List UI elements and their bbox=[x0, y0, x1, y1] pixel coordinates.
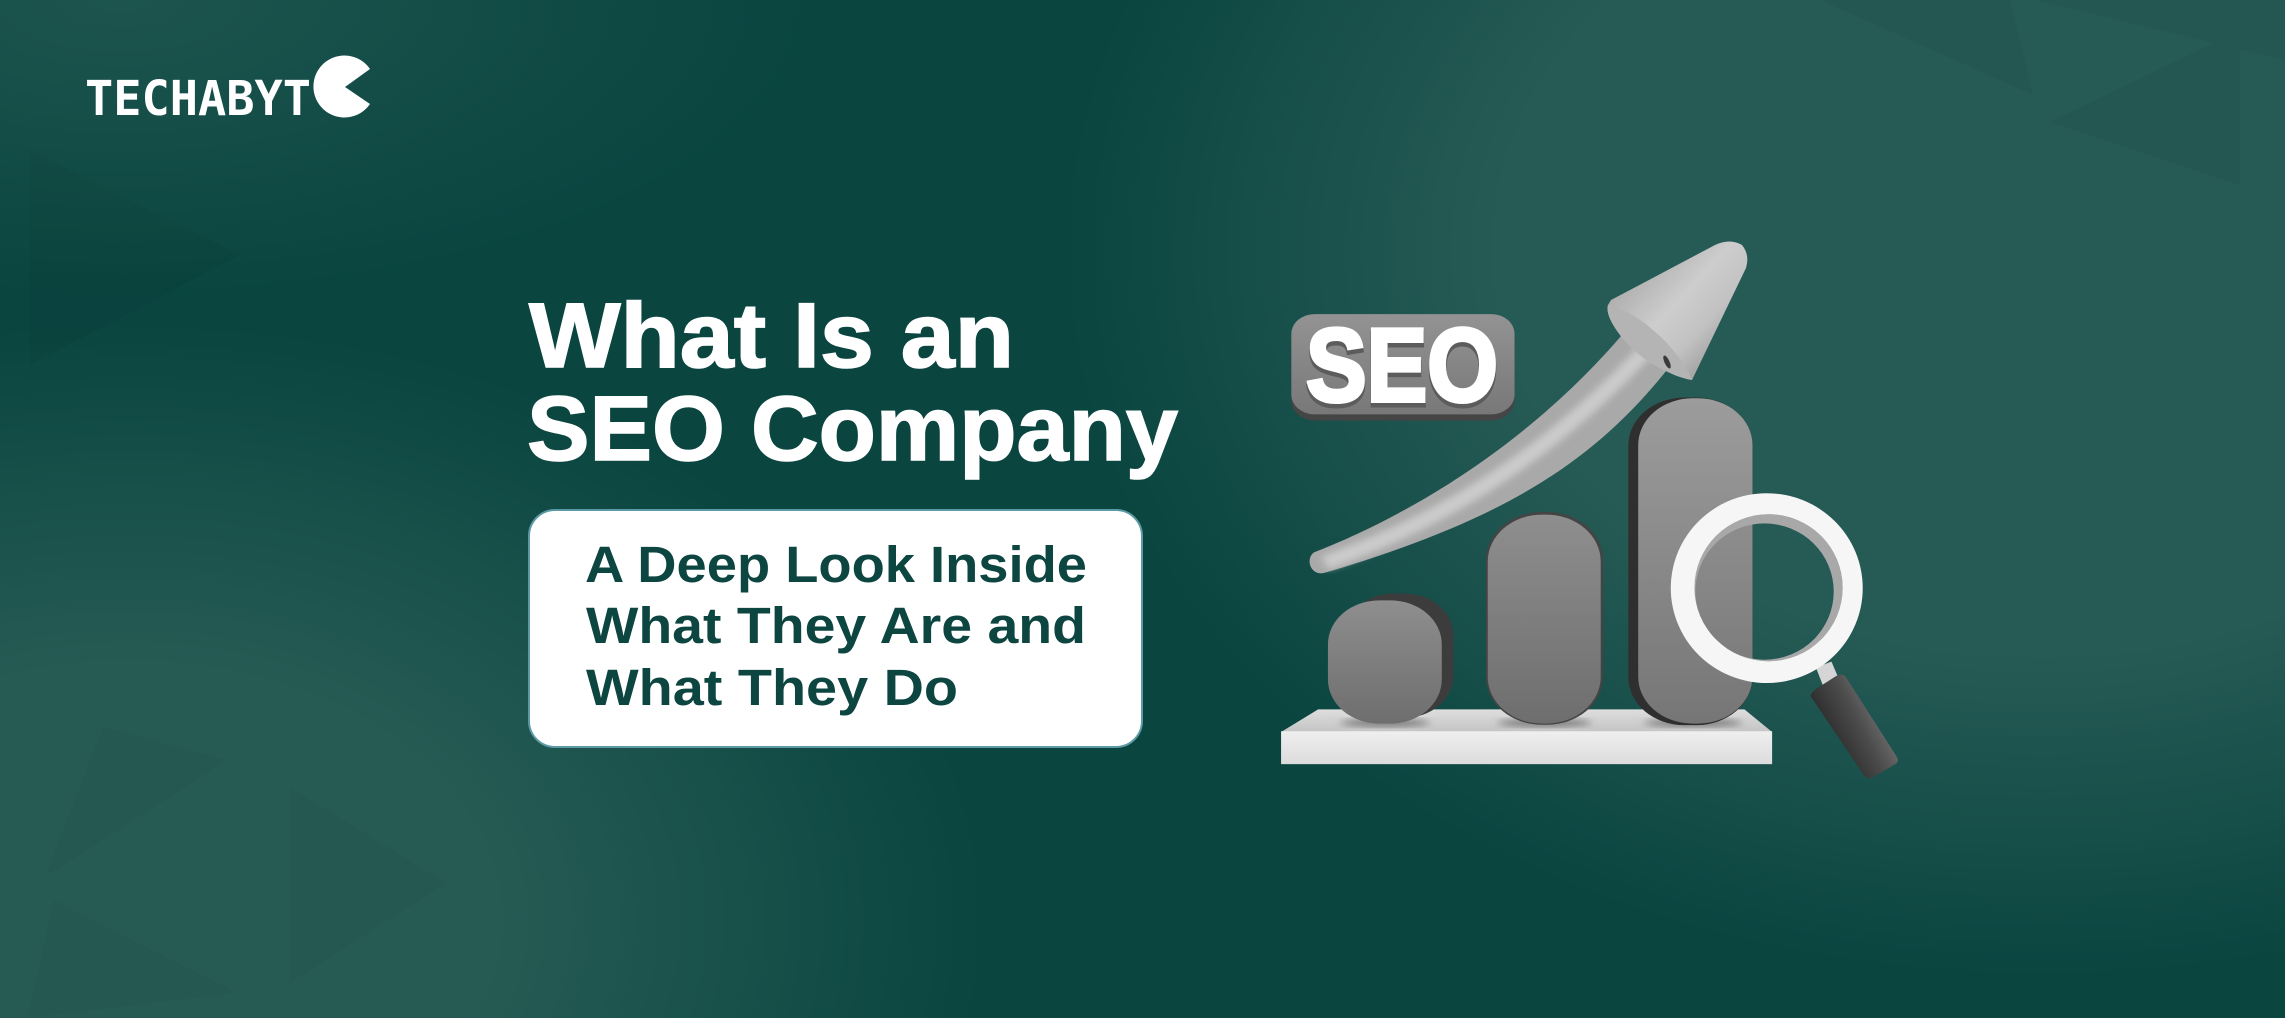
arrow head bbox=[1608, 242, 1747, 380]
bar 1 bbox=[1328, 593, 1453, 724]
title: What Is an bbox=[529, 285, 1014, 387]
magnifier ring bbox=[1671, 493, 1863, 683]
logo pac-man icon bbox=[313, 56, 370, 118]
logo wordmark: TECHABYT bbox=[85, 71, 311, 127]
logo: Techabyte bbox=[85, 56, 370, 127]
arrow bbox=[1310, 242, 1747, 573]
platform bbox=[1281, 709, 1772, 764]
SEO badge bbox=[1291, 308, 1515, 428]
subtitle text: What They Are and bbox=[586, 597, 1086, 654]
magnifier bbox=[1671, 493, 1898, 778]
SEO badge text: SEO bbox=[1306, 312, 1498, 428]
arrow shaft bbox=[1310, 332, 1666, 573]
subtitle text: What They Do bbox=[586, 659, 958, 716]
subtitle text bbox=[585, 536, 1087, 716]
magnifier inner bevel bbox=[1694, 514, 1843, 661]
subtitle panel bbox=[529, 510, 1142, 747]
magnifier handle bbox=[1816, 662, 1840, 690]
bar 3 bbox=[1628, 398, 1752, 725]
title: SEO Company bbox=[527, 378, 1178, 480]
SEO badge text: SEO bbox=[1306, 308, 1498, 424]
illustration: SEO growth chart bbox=[1281, 242, 1898, 778]
title bbox=[527, 285, 1178, 480]
subtitle text: A Deep Look Inside bbox=[585, 536, 1087, 593]
bar 2 bbox=[1486, 512, 1603, 725]
